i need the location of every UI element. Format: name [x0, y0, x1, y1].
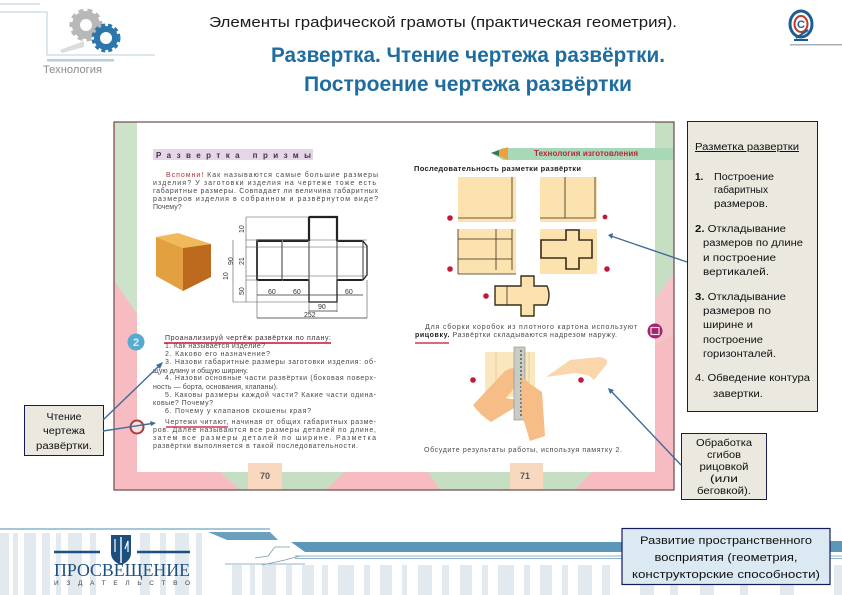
callout: reading the drawing: развёртки. [36, 441, 92, 452]
left page questions: Чертежи читают, начиная от общих габаритных разме- [165, 418, 377, 426]
chart: prism net drawing: 90 [228, 257, 235, 265]
left page questions: 5. Каковы размеры каждой части? Какие части одина- [165, 391, 377, 399]
callout: scoring the folds [682, 434, 766, 500]
heading: Построение чертежа развёртки [304, 73, 632, 96]
illustration: folded shape [546, 357, 607, 380]
left page questions: ров. Далее называются все размеры деталей по длине, [153, 426, 376, 434]
illustration: pencil banner: Технология изготовления [534, 149, 638, 158]
logo: Просвещение publisher [54, 535, 190, 587]
callout: scoring the folds: беговкой). [697, 485, 751, 497]
page number 70: 70 [260, 471, 270, 481]
chart: prism net drawing: 10 [239, 225, 246, 233]
callout: marking steps: и построение [703, 253, 777, 264]
right page text: Для сборки коробок из плотного картона используют [425, 323, 638, 331]
callout: marking steps: 1. [695, 172, 704, 183]
callout: marking steps: вертикалей. [703, 267, 769, 278]
callout: reading the drawing [24, 406, 104, 456]
chart: prism net drawing: 60 [293, 289, 301, 296]
callout: marking steps: размеров по длине [703, 238, 803, 249]
icon: technology emblem with gears [0, 4, 155, 62]
right page text [415, 323, 638, 454]
callout: marking steps [688, 122, 818, 412]
callout: scoring the folds: рицовкой [700, 462, 748, 473]
right page text: рицовку. Развёртки складываются надрезом наружу. [415, 332, 617, 339]
chart: prism net drawing: 60 [268, 289, 276, 296]
badge: purple marker [648, 324, 662, 338]
label: Технология: Технология [43, 64, 102, 76]
footer: circuit band [0, 529, 842, 565]
chart: prism net drawing: 21 [239, 257, 246, 265]
step 5: finished net [495, 276, 549, 316]
callout: spatial perception: конструкторские способности) [632, 569, 820, 581]
icon: publisher logo: С [797, 19, 805, 31]
title: Элементы графической грамоты (практическая геометрия). [209, 14, 677, 31]
callout: marking steps: ширине и [703, 320, 753, 331]
chart: prism net drawing: 10 [223, 272, 230, 280]
left page questions: ковые? Почему? [153, 400, 213, 407]
left page questions: 4. Назови основные части развёртки (боковая поверх- [165, 374, 377, 382]
heading [271, 44, 665, 96]
illustration: orange box [156, 233, 211, 291]
red underline: рицовку [415, 342, 449, 344]
badge: blue question marker: 2 [133, 337, 139, 349]
footer background stripes [0, 533, 842, 595]
chart: prism net drawing: 90 [318, 304, 326, 311]
callout: reading the drawing: Чтение [46, 412, 82, 423]
callout: marking steps: размеров по [703, 306, 771, 317]
callout: scoring the folds: сгибов [707, 449, 741, 461]
chart: prism net drawing: 50 [239, 287, 246, 295]
callout: spatial perception: Развитие пространственного [640, 535, 812, 547]
callout: marking steps: завертки. [713, 389, 763, 400]
left page intro text: Вспомни! Как называются самые большие размеры [166, 171, 378, 179]
callout: marking steps: габаритных [714, 184, 768, 196]
callout: marking steps: 3. Откладывание [695, 292, 786, 303]
left page questions [153, 334, 377, 450]
callout: marking steps: Построение [714, 172, 774, 183]
step 4 [540, 229, 597, 274]
panel: textbook spread [114, 122, 674, 490]
callout: marking steps: Разметка развертки [695, 142, 799, 153]
logo: Просвещение publisher: ПРОСВЕЩЕНИЕ [54, 560, 190, 580]
logo: Просвещение publisher: ИЗДАТЕЛЬСТВО [54, 580, 190, 587]
left page questions: 1. Как называется изделие? [165, 343, 265, 350]
step 3 [458, 229, 516, 274]
left page intro text: изделия? У заготовки изделия на чертеже тоже есть [153, 180, 376, 187]
left page questions: щую длину и общую ширину. [153, 367, 248, 375]
diagrams: marking sequence [458, 177, 597, 316]
left page intro text: размеров изделия в собранном и развёрнутом виде? [153, 195, 378, 203]
icon: publisher logo [790, 11, 842, 46]
left page intro text: Почему? [153, 204, 182, 211]
chart: prism net drawing: 252 [304, 312, 316, 319]
badge: red ring marker [130, 420, 144, 434]
callout: marking steps: построение [703, 335, 763, 346]
step 1 [458, 177, 516, 222]
left page questions: затем все размеры деталей по ширине. Разметка [153, 434, 376, 442]
illustration: hands with ruler [473, 347, 545, 441]
illustration: pencil banner [491, 147, 673, 160]
chart: prism net drawing: 60 [345, 289, 353, 296]
callout: marking steps: 2. Откладывание [695, 224, 786, 235]
step markers a and b [470, 377, 584, 383]
arrows: callouts to the textbook [103, 233, 687, 465]
left page questions: Проанализируй чертёж развёртки по плану: [165, 334, 331, 342]
callout: scoring the folds: (или [710, 474, 738, 485]
right page text: Обсудите результаты работы, используя памятку 2. [424, 446, 622, 454]
callout: marking steps: 4. Обведение контура [695, 372, 810, 384]
page backgrounds and coloured margins [114, 122, 674, 490]
callout: reading the drawing: чертежа [43, 426, 85, 437]
step number markers [447, 215, 610, 299]
callout: scoring the folds: Обработка [696, 437, 752, 449]
callout: marking steps: размеров. [714, 199, 768, 210]
red underlines [164, 343, 331, 427]
left page intro text [153, 171, 378, 211]
step 2 [540, 177, 597, 222]
callout: marking steps: горизонталей. [703, 349, 776, 360]
left page intro text: габаритные размеры. Совпадает ли величина габаритных [153, 187, 378, 195]
chart: prism net drawing [223, 217, 367, 319]
heading: Развертка. Чтение чертежа развёртки. [271, 44, 665, 67]
callout: spatial perception [622, 528, 830, 584]
left page questions: 2. Каково его назначение? [165, 351, 270, 358]
left page questions: ность — борта, основания, клапаны). [153, 383, 278, 391]
left page questions: 3. Назови габаритные размеры заготовки изделия: об- [165, 358, 377, 366]
page number 71: 71 [520, 471, 530, 481]
left page heading: Развертка призмы [156, 151, 311, 160]
left page questions: развёртки выполняется в такой последовательности. [153, 442, 358, 450]
badge: blue question marker [128, 334, 144, 350]
right page subheading: Последовательность разметки развёртки [414, 164, 581, 173]
left page questions: 6. Почему у клапанов скошены края? [165, 408, 311, 415]
callout: spatial perception: восприятия (геометрия, [654, 552, 798, 564]
